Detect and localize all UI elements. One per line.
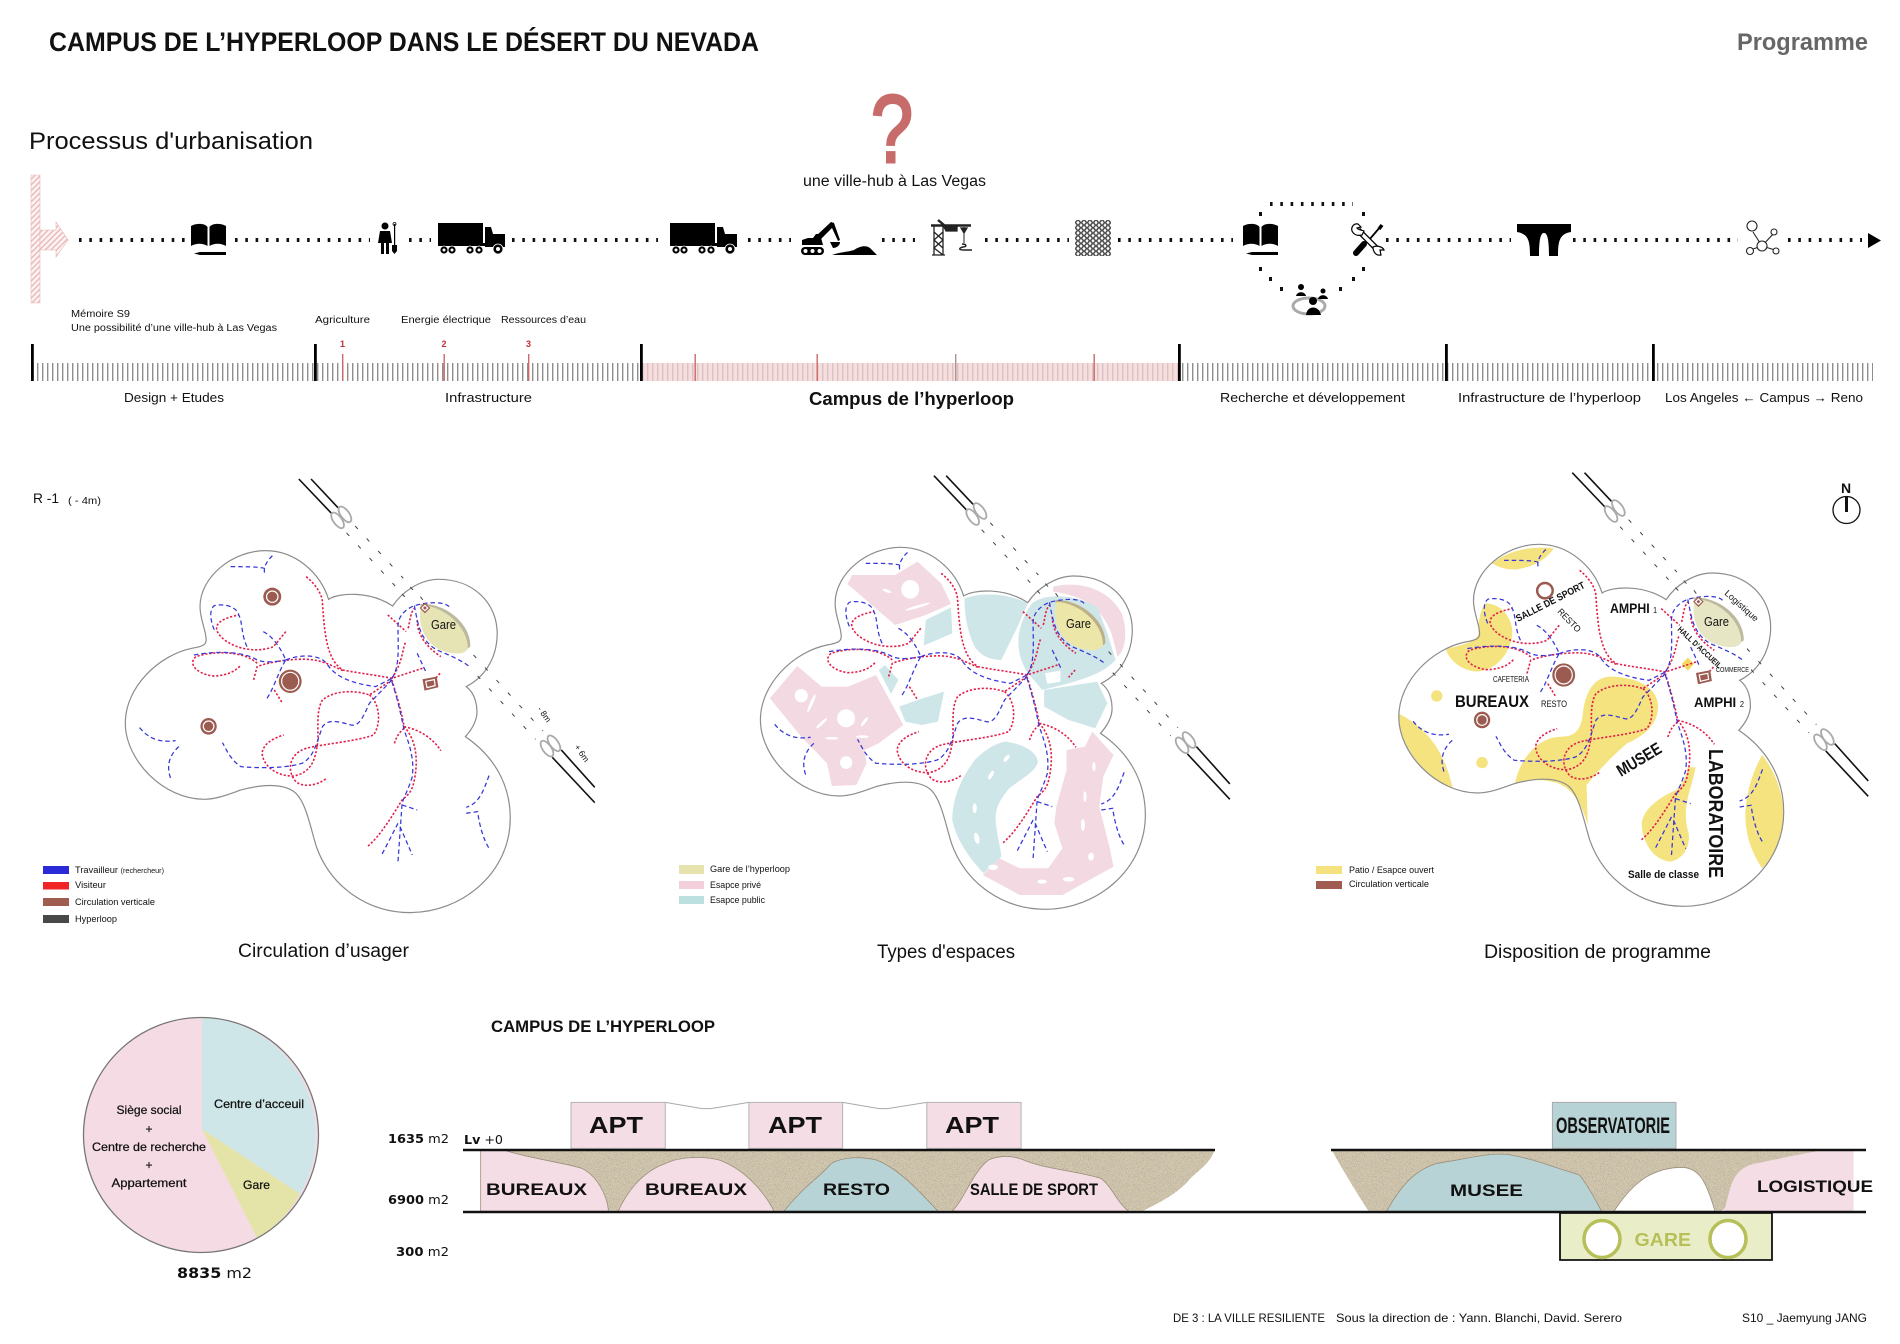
- phase labels: Recherche et développement: [1220, 390, 1405, 405]
- plan: types d'espaces: [760, 476, 1230, 909]
- programme labels: COMMERCE: [1716, 667, 1749, 674]
- level label: ( - 4m): [68, 496, 101, 507]
- surface labels: 1635 m2: [388, 1132, 449, 1146]
- section labels: [486, 1112, 1873, 1200]
- ruler: project phases: [31, 339, 1873, 381]
- icon: excavator: [801, 222, 877, 255]
- icon: hatched start arrow: [31, 175, 68, 303]
- programme labels: HALL D’ACCUEIL: [1676, 625, 1724, 670]
- legend: spaces: Esapce privé: [710, 880, 761, 890]
- courtyards: [795, 580, 1096, 884]
- legend: spaces: Esapce public: [710, 895, 765, 905]
- section labels: BUREAUX: [486, 1180, 588, 1199]
- gare box: GARE: [1634, 1230, 1691, 1250]
- legend: circulation: [43, 865, 164, 924]
- labels above the ruler: Mémoire S9: [71, 309, 130, 320]
- apartment boxes: [571, 1102, 1021, 1148]
- programme labels: Logistique: [1723, 588, 1761, 624]
- phase labels: Infrastructure de l’hyperloop: [1458, 390, 1641, 405]
- gare: [1693, 598, 1744, 647]
- depth labels: - 8m: [535, 704, 553, 724]
- section labels: BUREAUX: [645, 1180, 748, 1199]
- icon: wrench and screwdriver: [1352, 224, 1384, 255]
- pie labels: +: [145, 1122, 153, 1136]
- station label: Gare: [1066, 616, 1091, 631]
- station label: Gare: [431, 617, 456, 632]
- depth labels: [535, 704, 592, 764]
- icon: truck: [438, 223, 505, 254]
- gare: [420, 604, 470, 653]
- surface labels: 6900 m2: [388, 1193, 449, 1207]
- private spaces: [770, 562, 1125, 895]
- legend: programme: Circulation verticale: [1349, 879, 1429, 889]
- pie labels: Centre de recherche: [92, 1140, 206, 1154]
- caption: Types d'espaces: Types d'espaces: [877, 942, 1015, 963]
- legend: programme: [1316, 865, 1434, 889]
- legend: spaces: Gare de l’hyperloop: [710, 864, 790, 874]
- plan: disposition de programme: [1399, 473, 1868, 906]
- surface labels: Lv +0: [464, 1133, 503, 1147]
- level label: [33, 490, 101, 507]
- labels above the ruler: Ressources d’eau: [501, 315, 586, 326]
- section labels: RESTO: [823, 1180, 890, 1199]
- depth labels: + 6m: [572, 742, 592, 764]
- section labels: OBSERVATORIE: [1556, 1113, 1670, 1138]
- icon: farmer with shovel: [378, 222, 397, 254]
- icon: north arrow: [1833, 480, 1860, 524]
- section labels: APT: [945, 1112, 999, 1138]
- phase labels: Los Angeles ← Campus → Reno: [1665, 390, 1863, 405]
- programme labels: RESTO: [1541, 699, 1567, 709]
- icon: truck: [670, 223, 737, 254]
- arrowhead: [1868, 233, 1881, 248]
- surface labels: 300 m2: [396, 1245, 449, 1259]
- programme labels: LABORATOIRE: [1704, 749, 1726, 878]
- public spaces: [879, 594, 1116, 873]
- vertical circulation: [200, 588, 438, 735]
- icon: book: [1243, 224, 1278, 255]
- heading: Programme: Programme: [1737, 29, 1868, 56]
- heading: section: CAMPUS DE L’HYPERLOOP: [491, 1017, 715, 1036]
- footer credits: [1173, 1311, 1867, 1325]
- labels above the ruler: Energie électrique: [401, 315, 491, 326]
- labels above the ruler: [71, 309, 586, 334]
- programme labels: AMPHI 1: [1610, 600, 1657, 616]
- labels above the ruler: Une possibilité d’une ville-hub à Las Vegas: [71, 323, 277, 334]
- legend: circulation: Hyperloop: [75, 914, 117, 924]
- phase labels: [124, 389, 1863, 409]
- legend: programme: Patio / Esapce ouvert: [1349, 865, 1434, 875]
- pie labels: +: [145, 1158, 153, 1172]
- phase labels: Infrastructure: [445, 390, 532, 405]
- gare box: [1560, 1213, 1772, 1260]
- caption: Circulation d'usager: Circulation d’usager: [238, 941, 410, 962]
- red step numbers: 3: [526, 339, 531, 349]
- legend: circulation: Circulation verticale: [75, 897, 155, 907]
- legend: circulation: Travailleur (rechercheur): [75, 865, 164, 875]
- pie labels: [92, 1097, 304, 1192]
- heading: Processus d'urbanisation: Processus d'urbanisation: [29, 128, 313, 155]
- icon: mesh structure: [1075, 220, 1111, 256]
- gare: [1055, 600, 1105, 650]
- icon: tower crane: [931, 220, 972, 255]
- ground lines: [463, 1150, 1866, 1212]
- programme labels: CAFETERIA: [1493, 675, 1530, 684]
- red step numbers: 1: [340, 339, 345, 349]
- programme labels: RESTO: [1556, 606, 1583, 634]
- phase labels: Design + Etudes: [124, 390, 225, 405]
- section drawing: [463, 1102, 1873, 1260]
- section labels: MUSEE: [1450, 1181, 1523, 1200]
- icon: network nodes: [1746, 221, 1779, 254]
- red step numbers: 2: [441, 339, 447, 349]
- title: CAMPUS DE L’HYPERLOOP DANS LE DÉSERT DU NEVADA: [49, 26, 759, 57]
- programme labels: Gare: [1704, 614, 1729, 629]
- pie labels: Gare: [243, 1178, 270, 1192]
- red step numbers: [340, 339, 531, 349]
- section right: earth and rooms: [1332, 1102, 1854, 1211]
- section labels: LOGISTIQUE: [1757, 1177, 1873, 1196]
- footer credits: S10 _ Jaemyung JANG: [1742, 1311, 1867, 1325]
- pie labels: Siège social: [116, 1103, 182, 1117]
- dotted process line: [79, 238, 1862, 242]
- dotted research loop: [1259, 204, 1365, 291]
- level label: R -1: [33, 490, 59, 506]
- icon: north arrow: N: [1841, 480, 1851, 496]
- timeline: process dotted line with icons: [31, 175, 1881, 315]
- footer credits: DE 3 : LA VILLE RESILIENTE: [1173, 1311, 1325, 1325]
- section labels: APT: [589, 1112, 643, 1138]
- patios: [1399, 548, 1783, 868]
- icon: question mark: ?: [871, 76, 913, 183]
- section labels: APT: [768, 1112, 822, 1138]
- icon: book: [191, 224, 226, 255]
- pie labels: Centre d’acceuil: [214, 1097, 304, 1111]
- surface labels: [388, 1132, 503, 1259]
- programme labels: Salle de classe: [1628, 869, 1699, 881]
- pie chart: [84, 1018, 318, 1252]
- programme labels: AMPHI 2: [1694, 694, 1745, 710]
- section labels: SALLE DE SPORT: [970, 1180, 1099, 1199]
- caption: Disposition de programme: Disposition de programme: [1484, 942, 1711, 963]
- legend: spaces: [679, 864, 790, 905]
- plan: circulation d'usager: [125, 479, 595, 913]
- icon: viaduct: [1517, 224, 1571, 256]
- programme labels: MUSEE: [1613, 739, 1665, 780]
- text: question caption: une ville-hub à Las Vegas: [803, 173, 986, 190]
- programme labels: BUREAUX: [1455, 692, 1530, 711]
- section left: earth and rooms: [481, 1102, 1215, 1211]
- legend: circulation: Visiteur: [75, 880, 106, 890]
- phase labels: Campus de l’hyperloop: [809, 389, 1014, 409]
- footer credits: Sous la direction de : Yann. Blanchi, David. Serero: [1336, 1311, 1622, 1325]
- pie total: 8835 m2: [177, 1266, 252, 1282]
- pie labels: Appartement: [112, 1176, 187, 1190]
- programme labels: [1455, 580, 1761, 881]
- labels above the ruler: Agriculture: [315, 315, 370, 326]
- programme labels: SALLE DE SPORT: [1514, 580, 1587, 625]
- vertical circulation: [1474, 583, 1712, 728]
- icon: research team: [1293, 284, 1328, 315]
